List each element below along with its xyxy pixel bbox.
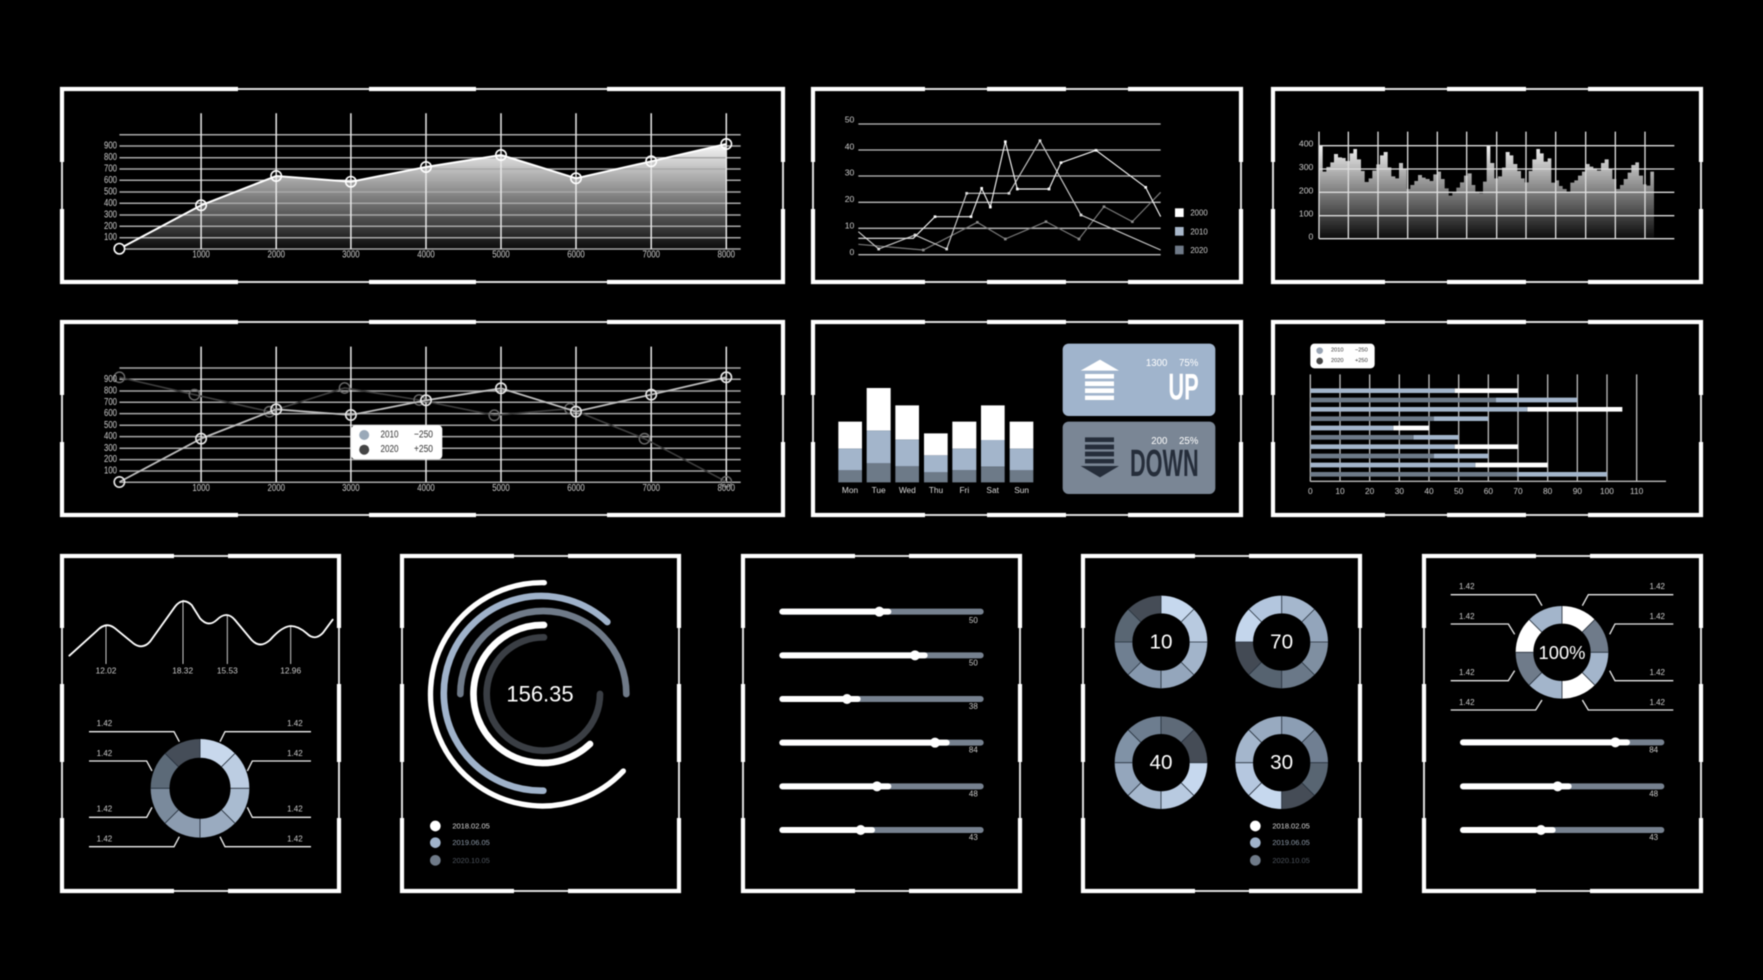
y axis labels [845, 115, 855, 257]
donut 40: 40 [1150, 751, 1172, 774]
panel: stepped area chart [1273, 89, 1701, 282]
up label: UP [1168, 366, 1199, 408]
slider 3 [779, 694, 984, 711]
x axis labels: 6000 [567, 250, 585, 260]
callout lines [1451, 595, 1673, 710]
weekday labels: Wed [899, 485, 916, 495]
y axis labels [1299, 139, 1314, 242]
y axis labels: 200 [104, 221, 117, 232]
grid lines [119, 347, 741, 482]
x axis labels: 50 [1454, 486, 1464, 496]
icon: up arrow [1081, 360, 1119, 400]
slider 3: 38 [969, 702, 978, 711]
legend card: 2010 [1331, 348, 1344, 354]
callout values: 1.42 [97, 834, 113, 843]
legend: 2019.06.05 [452, 838, 490, 847]
y axis labels: 100 [104, 466, 117, 476]
y axis labels: 300 [104, 443, 117, 454]
y axis labels: 900 [104, 374, 117, 385]
x axis labels: 5000 [492, 250, 510, 260]
stepped area [1319, 146, 1654, 239]
panel: four donuts [1083, 556, 1360, 891]
x axis labels: 30 [1395, 486, 1404, 496]
y axis labels: 500 [104, 420, 117, 431]
legend [430, 821, 490, 866]
callout values: 1.42 [97, 749, 113, 758]
y axis labels: 600 [104, 175, 117, 186]
panel: area chart [62, 89, 783, 282]
x axis labels: 3000 [342, 483, 360, 494]
weekday labels: Tue [872, 485, 886, 495]
radial arcs [430, 583, 626, 806]
area fill [119, 144, 726, 249]
panel: wave and donut callouts [62, 556, 339, 891]
donut 70: 70 [1270, 630, 1293, 653]
legend: 2018.02.05 [1272, 821, 1310, 830]
donut 10: 10 [1150, 630, 1172, 653]
x axis labels: 3000 [342, 250, 360, 260]
donut chart [151, 739, 249, 838]
y axis labels: 400 [104, 431, 117, 442]
slider 5 [779, 781, 984, 798]
x axis labels: 8000 [718, 483, 735, 494]
weekday labels: Thu [929, 485, 944, 495]
x axis labels: 80 [1543, 486, 1553, 496]
x axis labels: 90 [1573, 486, 1582, 496]
weekday labels [842, 485, 1029, 495]
y axis labels: 700 [104, 397, 117, 408]
donut 30: 30 [1270, 751, 1293, 774]
slider 84: 84 [1649, 745, 1659, 754]
callout values: 1.42 [287, 719, 303, 728]
up stats: 75% [1179, 358, 1199, 369]
wave labels [96, 666, 301, 676]
x axis labels: 0 [1308, 486, 1313, 496]
panel: sliders [743, 556, 1020, 891]
y axis labels: 0 [1309, 232, 1314, 242]
panel: horizontal bar chart [1273, 322, 1701, 515]
grid lines [1319, 132, 1674, 239]
y axis labels: 800 [104, 152, 117, 163]
down stats: 25% [1179, 436, 1199, 447]
y axis labels: 300 [1299, 162, 1314, 172]
x axis labels: 6000 [567, 483, 585, 494]
legend card: −250 [1355, 348, 1368, 354]
panel frame [62, 89, 783, 282]
donut 40 [1115, 716, 1207, 809]
y axis labels: 20 [845, 194, 855, 204]
y axis labels: 700 [104, 164, 117, 174]
panel: donut callouts and sliders [1424, 556, 1701, 891]
x axis labels: 20 [1365, 486, 1375, 496]
legend [1250, 821, 1310, 866]
callout values: 1.42 [287, 804, 303, 813]
y axis labels: 400 [1299, 139, 1314, 149]
donut 10 [1115, 596, 1207, 688]
callout values [1459, 582, 1666, 707]
weekday labels: Mon [842, 485, 858, 495]
callout values: 1.42 [1649, 698, 1666, 707]
x axis labels: 110 [1630, 486, 1644, 496]
x axis labels [1308, 486, 1644, 496]
legend: 2020.10.05 [452, 856, 490, 865]
x axis labels: 7000 [642, 250, 660, 260]
gauge value: 156.35 [506, 681, 574, 706]
slider 2 [779, 650, 984, 667]
wave stems [106, 600, 291, 664]
panel: multi line chart [813, 89, 1241, 282]
weekday labels: Fri [959, 485, 969, 495]
panel: two line comparison chart [62, 322, 783, 515]
y axis labels: 800 [104, 386, 117, 396]
donut 30 [1235, 716, 1328, 809]
y axis labels: 300 [104, 210, 117, 220]
slider 6 [779, 825, 984, 842]
x axis labels: 40 [1424, 486, 1434, 496]
x axis labels: 70 [1513, 486, 1523, 496]
slider 43 [1460, 825, 1664, 842]
down stats [1151, 436, 1199, 447]
down stats: 200 [1151, 436, 1167, 447]
donut 100% [1516, 606, 1608, 699]
panel frame [1273, 322, 1701, 515]
y axis labels [104, 374, 117, 476]
slider 4: 84 [969, 745, 978, 754]
x axis labels: 8000 [718, 250, 735, 260]
panel frame [1273, 89, 1701, 282]
callout values: 1.42 [1649, 612, 1666, 621]
y axis labels: 30 [845, 167, 855, 177]
x axis labels: 1000 [192, 250, 210, 260]
callout values [97, 719, 303, 843]
y axis labels: 100 [1299, 208, 1314, 218]
weekday labels: Sat [986, 485, 1000, 495]
legend card: 2020 [380, 444, 399, 455]
panel frame [402, 556, 679, 891]
up card [1063, 344, 1215, 416]
legend: 2018.02.05 [452, 821, 490, 830]
bars [1310, 388, 1622, 477]
slider 4 [779, 738, 984, 754]
wave labels: 18.32 [172, 666, 193, 676]
series 2010 light line [114, 372, 731, 487]
y axis labels: 0 [850, 247, 855, 257]
grid lines [119, 113, 741, 249]
callout values: 1.42 [1459, 668, 1475, 677]
panel frame [813, 89, 1241, 282]
x axis labels: 5000 [492, 483, 510, 494]
down label: DOWN [1130, 442, 1199, 485]
up stats [1146, 358, 1199, 369]
legend: 2020.10.05 [1272, 856, 1310, 865]
legend card: +250 [414, 444, 433, 455]
slider 48 [1460, 781, 1664, 798]
wave labels: 15.53 [217, 666, 238, 676]
slider 84 [1460, 737, 1664, 754]
panel frame [743, 556, 1020, 891]
x axis labels [192, 250, 735, 260]
y axis labels: 40 [845, 141, 855, 151]
series 2020 [858, 192, 1161, 251]
y axis labels: 200 [1299, 185, 1314, 195]
y axis labels: 10 [845, 221, 855, 231]
legend card: 2010 [380, 430, 399, 440]
callout values: 1.42 [287, 749, 303, 758]
icon: down arrow [1081, 437, 1119, 477]
callout values: 1.42 [1459, 698, 1475, 707]
donut 100%: 100% [1539, 642, 1585, 663]
callout values: 1.42 [1649, 582, 1666, 591]
legend card: −250 [414, 430, 433, 440]
x axis labels: 10 [1335, 486, 1345, 496]
x axis labels: 100 [1600, 486, 1614, 496]
legend: 2000 [1190, 208, 1208, 218]
x axis labels [192, 483, 735, 494]
panel frame [813, 322, 1241, 515]
wave line [69, 601, 333, 656]
y axis labels: 600 [104, 408, 117, 419]
x axis labels: 2000 [267, 250, 285, 260]
grid lines [1310, 374, 1666, 482]
legend card [351, 425, 442, 459]
panel frame [1424, 556, 1701, 891]
x axis labels: 2000 [267, 483, 285, 494]
slider 6: 43 [969, 833, 978, 842]
callout values: 1.42 [97, 804, 113, 813]
x axis labels: 4000 [417, 483, 435, 494]
callout values: 1.42 [1649, 668, 1666, 677]
y axis labels: 900 [104, 140, 117, 152]
data line [119, 144, 726, 249]
slider 5: 48 [969, 789, 978, 798]
series 2020 dark line [114, 372, 731, 487]
down card [1063, 422, 1215, 494]
legend card [1310, 344, 1375, 368]
x axis labels: 7000 [642, 483, 660, 494]
panel: concentric radial gauge [402, 556, 679, 891]
donut 70 [1235, 596, 1328, 688]
callout values: 1.42 [287, 834, 303, 843]
y axis labels: 400 [104, 198, 117, 209]
series 2000 [858, 140, 1161, 238]
wave labels: 12.96 [280, 666, 301, 676]
panel frame [62, 556, 339, 891]
panel frame [62, 322, 783, 515]
weekday labels: Sun [1014, 485, 1029, 495]
slider 1 [779, 607, 984, 625]
stacked bar chart [838, 388, 1033, 482]
y axis labels: 100 [104, 232, 117, 243]
panel frame [1083, 556, 1360, 891]
x axis labels: 4000 [417, 250, 435, 260]
legend card: +250 [1355, 358, 1368, 364]
x axis labels: 1000 [192, 483, 210, 494]
legend [1175, 208, 1208, 255]
slider 43: 43 [1649, 833, 1659, 842]
callout values: 1.42 [1459, 612, 1475, 621]
y axis labels [104, 140, 117, 243]
wave labels: 12.02 [96, 666, 117, 676]
legend card: 2020 [1331, 358, 1344, 364]
y axis labels: 500 [104, 186, 117, 198]
y axis labels: 200 [104, 454, 117, 465]
panel: weekly bars and up/down cards [813, 322, 1241, 515]
data point markers [114, 139, 731, 254]
slider 2: 50 [969, 658, 978, 667]
callout values: 1.42 [97, 719, 113, 728]
legend: 2020 [1190, 245, 1208, 255]
series 2010 [858, 139, 1161, 250]
grid lines [858, 124, 1161, 255]
up stats: 1300 [1146, 358, 1167, 369]
callout lines [89, 732, 311, 847]
legend: 2010 [1190, 226, 1208, 236]
x axis labels: 60 [1484, 486, 1493, 496]
slider 48: 48 [1649, 789, 1659, 798]
y axis labels: 50 [845, 115, 855, 125]
callout values: 1.42 [1459, 582, 1475, 591]
slider 1: 50 [969, 616, 978, 625]
legend: 2019.06.05 [1272, 838, 1310, 847]
